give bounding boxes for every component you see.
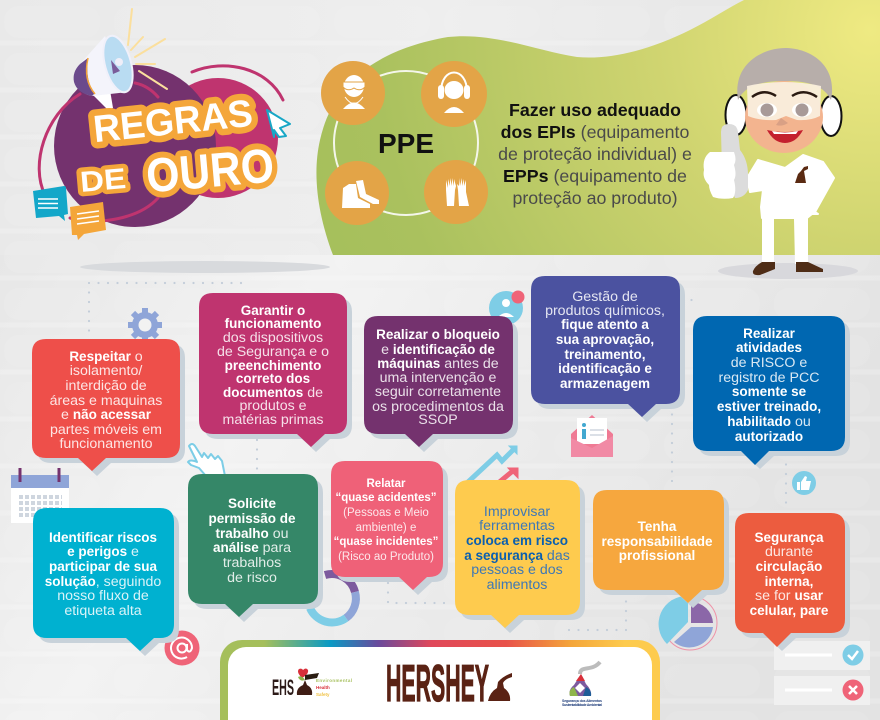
icon: envelope [571, 415, 613, 457]
speech bubble: atividades de risco: de RISCO e [731, 355, 807, 371]
logo: Hershey [386, 655, 512, 713]
speech bubble: produtos quimicos: sua aprovação, [556, 332, 654, 347]
logo: EHS: Environmental [316, 678, 352, 683]
text block: EPI and EPP [498, 100, 692, 208]
speech bubble: garantir: Garantir o [241, 303, 305, 318]
speech bubble: permissao de trabalho [188, 474, 323, 622]
icon: chat bubble orange [70, 202, 106, 240]
speech bubble: respeitar: partes móveis em [50, 422, 162, 438]
speech bubble: quase acidentes: (Risco ao Produto) [338, 551, 434, 563]
dotted connectors [89, 283, 786, 630]
speech bubble: respeitar: interdição de [65, 378, 147, 394]
icon: goggles head [321, 61, 385, 125]
speech bubble: produtos quimicos: armazenagem [560, 376, 650, 391]
icon: at sign [164, 630, 200, 666]
speech bubble: celular: se for usar [755, 588, 824, 604]
speech bubble: identificar riscos: participar de sua [49, 559, 158, 574]
icon: thumbs up badge [792, 471, 816, 495]
speech bubble: identificar riscos: e perigos e [67, 544, 139, 560]
speech bubble: permissao de trabalho: Solicite [228, 496, 276, 511]
speech bubble: improvisar: pessoas e dos [471, 562, 563, 578]
speech bubble: celular: circulação [756, 559, 822, 574]
icon: growth arrows [468, 446, 518, 484]
speech bubble: respeitar: e não acessar [61, 407, 152, 423]
speech bubble: improvisar: ferramentas [479, 518, 555, 534]
character: worker with thumbs up [704, 48, 858, 279]
speech bubble: respeitar: áreas e maquinas [50, 393, 162, 409]
icon: cursor [267, 110, 290, 137]
speech bubble: respeitar [32, 339, 185, 476]
icon: chat bubble blue [33, 186, 68, 221]
speech bubble: produtos quimicos [531, 276, 685, 422]
panel: PPE diagram [321, 61, 488, 225]
speech bubble: atividades de risco: autorizado [735, 429, 803, 444]
speech bubble: bloqueio [364, 316, 518, 452]
speech bubble: identificar riscos: Identificar riscos [49, 530, 157, 545]
ring [334, 71, 478, 215]
speech bubble: identificar riscos [33, 508, 179, 656]
speech bubble: quase acidentes: ambiente) e [356, 522, 416, 534]
speech bubble: produtos quimicos: produtos químicos, [545, 303, 665, 319]
speech bubble: atividades de risco [693, 316, 850, 469]
speech bubble: improvisar: alimentos [487, 577, 547, 593]
speech bubble: produtos quimicos: Gestão de [572, 289, 638, 305]
speech bubble: quase acidentes [331, 461, 448, 595]
header green wave [316, 0, 880, 255]
title text: OURO [144, 140, 276, 203]
speech bubble: improvisar: a segurança das [464, 548, 570, 564]
icon: user notification [489, 290, 524, 325]
speech bubble: bloqueio: seguir corretamente [375, 384, 501, 400]
speech bubble: identificar riscos: solução, seguindo [45, 574, 161, 590]
mouth [767, 130, 803, 143]
footer panel [220, 640, 660, 720]
logo: EHS: Health [316, 685, 330, 690]
speech bubble: improvisar: coloca em risco [466, 533, 568, 548]
speech bubble: atividades de risco: registro de PCC [719, 370, 819, 386]
speech bubble: responsabilidade: profissional [619, 548, 695, 563]
logo: regras de ouro [33, 9, 290, 240]
check row [774, 641, 870, 670]
speech bubble: permissao de trabalho: de risco [227, 570, 277, 586]
speech bubble: celular: Segurança [754, 530, 824, 545]
speech bubble: respeitar: Respeitar o [69, 349, 143, 365]
cross row [774, 676, 870, 705]
speech bubble: celular: durante [765, 544, 813, 560]
chest logo [795, 166, 808, 183]
speech bubble: atividades de risco: habilitado ou [727, 414, 811, 430]
goggles [747, 82, 821, 120]
icon: calendar [11, 468, 69, 523]
speech bubble: produtos quimicos: fique atento a [561, 317, 649, 332]
earmuffs [726, 95, 746, 135]
logo: EHS [272, 668, 352, 700]
icon: ear protection head [421, 61, 487, 127]
title text [79, 93, 276, 203]
speech bubble: celular [735, 513, 850, 651]
speech bubble: bloqueio: máquinas antes de [377, 356, 499, 372]
title text: DE [79, 163, 127, 199]
speech bubble: permissao de trabalho: permissão de [208, 511, 296, 526]
speech bubble: garantir: documentos de [223, 385, 323, 401]
title text: REGRAS [91, 93, 255, 151]
speech bubble: atividades de risco: estiver treinado, [717, 399, 821, 414]
icon: megaphone [74, 9, 167, 110]
legs and body [762, 215, 808, 264]
logo: EHS: Safety [316, 692, 330, 697]
speech bubble: bloqueio: os procedimentos da [372, 399, 504, 415]
speech bubble: improvisar [455, 480, 585, 633]
speech bubble: responsabilidade: Tenha [638, 519, 677, 534]
icon: hand pointer [188, 444, 225, 476]
icon: boots [325, 161, 389, 225]
speech bubble: permissao de trabalho: trabalho ou [216, 526, 288, 542]
text block: EPI and EPP: Fazer uso adequado [509, 100, 681, 120]
speech bubble: bloqueio: SSOP [418, 412, 458, 428]
speech bubble: produtos quimicos: treinamento, [564, 347, 646, 362]
speech bubble: atividades de risco: atividades [736, 340, 802, 355]
heading: PPE: PPE [378, 128, 434, 159]
speech bubble: garantir: funcionamento [225, 316, 321, 331]
speech bubble: identificar riscos: nosso fluxo de [57, 588, 149, 604]
hair cap [737, 48, 832, 100]
speech bubble: garantir [199, 293, 352, 452]
speech bubble: atividades de risco: somente se [732, 384, 807, 399]
speech bubble: garantir: preenchimento [225, 358, 321, 373]
speech bubble: garantir: matérias primas [223, 412, 323, 428]
logo: food safety: Segurança dos Alimentos [562, 699, 602, 703]
speech bubble: produtos quimicos: identificação e [558, 361, 652, 376]
speech bubble: identificar riscos: etiqueta alta [64, 603, 142, 619]
hand thumbs up [721, 124, 748, 198]
speech bubble: bloqueio: e identificação de [381, 342, 495, 358]
speech bubble: responsabilidade [593, 490, 729, 608]
logo: food safety [562, 662, 602, 707]
speech bubble: garantir: dos dispositivos [223, 330, 323, 346]
speech bubble: quase acidentes: “quase incidentes” [334, 536, 438, 548]
speech bubble: respeitar: funcionamento [59, 436, 153, 452]
icon: gloves [424, 160, 488, 224]
logo: Hershey: HERSHEY [386, 655, 489, 713]
shoes [753, 262, 823, 275]
speech bubble: permissao de trabalho: trabalhos [223, 555, 281, 571]
checklist [774, 641, 870, 705]
text block: EPI and EPP: proteção ao produto) [512, 188, 678, 208]
text block: EPI and EPP: EPPs (equipamento de [503, 166, 687, 186]
speech bubble: quase acidentes: Relatar [366, 478, 406, 490]
speech bubble: bloqueio: uma intervenção e [380, 370, 496, 386]
speech bubble: quase acidentes: “quase acidentes” [336, 492, 436, 504]
speech bubble: celular: interna, [765, 574, 813, 589]
speech bubble: garantir: correto dos [236, 371, 310, 386]
logo backdrop circles [39, 65, 283, 227]
face [745, 81, 823, 153]
speech bubble: improvisar: Improvisar [484, 504, 550, 520]
text block: EPI and EPP: de proteção individual) e [498, 144, 692, 164]
chart: pie [659, 596, 717, 650]
chart: donut [310, 574, 356, 622]
speech bubble: garantir: produtos e [239, 398, 307, 414]
logo: food safety: Sustentabilidade Ambiental [562, 703, 602, 707]
speech bubble: bloqueio: Realizar o bloqueio [376, 327, 500, 342]
shadow [718, 263, 858, 279]
text block: EPI and EPP: dos EPIs (equipamento [501, 122, 689, 142]
icon: gear [128, 308, 162, 342]
speech bubble: celular: celular, pare [750, 603, 829, 618]
speech bubble: quase acidentes: (Pessoas e Meio [343, 507, 429, 519]
speech bubble: responsabilidade: responsabilidade [601, 534, 713, 549]
speech bubble: respeitar: isolamento/ [70, 363, 142, 379]
speech bubble: garantir: de Segurança e o [217, 344, 329, 360]
speech bubble: permissao de trabalho: análise para [213, 540, 291, 556]
speech bubble: atividades de risco: Realizar [743, 326, 796, 341]
logo: EHS: EHS [272, 675, 294, 700]
